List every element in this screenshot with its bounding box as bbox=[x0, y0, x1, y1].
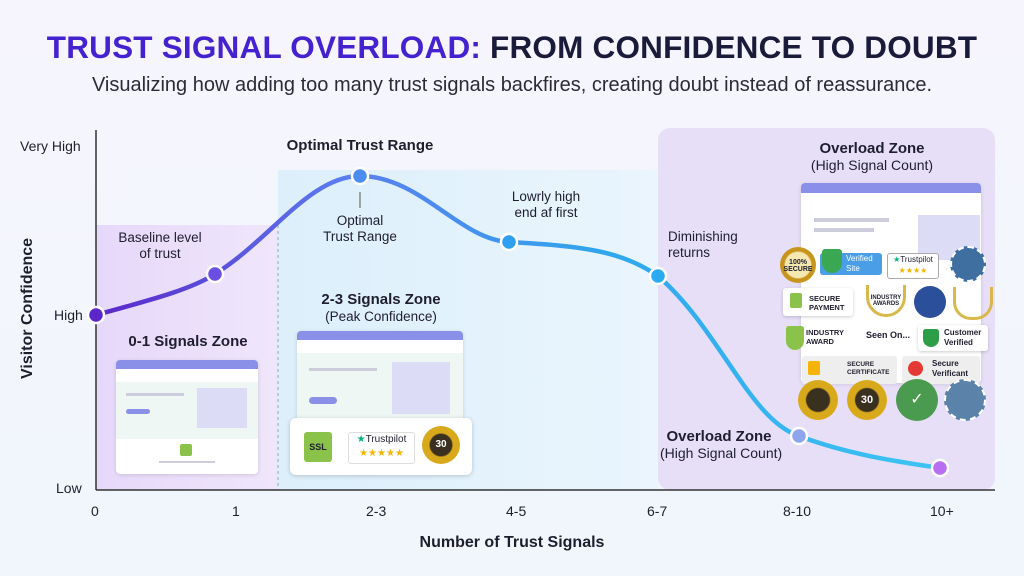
text: Very High bbox=[20, 138, 81, 154]
panel: overload browser with badges: Customer bbox=[944, 328, 981, 337]
panel: overload browser with badges: ★★★★ bbox=[899, 266, 927, 275]
badges row 1: SECURE bbox=[783, 266, 813, 273]
panel: 2-3 signals zone: 2-3 Signals Zone bbox=[321, 291, 441, 308]
x axis labels: 1 bbox=[232, 503, 240, 519]
panel: overload browser with badges: 30 bbox=[861, 394, 873, 406]
badges row 4: CERTIFICATE bbox=[847, 369, 890, 376]
panel: overload browser with badges: Verificant bbox=[932, 369, 968, 378]
panel: overload browser with badges: INDUSTRY bbox=[806, 328, 844, 337]
panel: overload browser with badges: ✓ bbox=[910, 391, 924, 408]
badges row 2 bbox=[783, 288, 853, 316]
x axis title: Number of Trust Signals bbox=[420, 534, 604, 551]
panel: overload browser with badges: Verified bbox=[944, 338, 973, 347]
badges row 4: SECURE bbox=[847, 361, 874, 368]
panel: overload browser with badges: ★Trustpilot bbox=[893, 255, 933, 264]
trust badges card: SSL bbox=[309, 442, 327, 452]
panel: overload browser with badges: Secure bbox=[932, 359, 959, 368]
text: Overload Zone bbox=[666, 428, 772, 445]
trust badges card: ★Trustpilot bbox=[357, 434, 406, 445]
panel: overload browser with badges: INDUSTRY bbox=[871, 295, 901, 301]
panel: overload browser with badges bbox=[780, 182, 993, 421]
text: end af first bbox=[514, 205, 578, 220]
x axis labels: 0 bbox=[91, 503, 99, 519]
seal badges bbox=[798, 380, 838, 420]
annotations: of trust bbox=[139, 246, 181, 261]
text: Trust Range bbox=[323, 229, 397, 244]
text: Overload Zone bbox=[819, 140, 925, 157]
text: Lowrly high bbox=[512, 189, 580, 204]
text: Diminishing bbox=[668, 229, 738, 244]
curve bbox=[96, 176, 940, 468]
text: (High Signal Count) bbox=[811, 157, 933, 173]
x axis labels: 4-5 bbox=[506, 503, 526, 519]
badges row 2: PAYMENT bbox=[809, 303, 844, 312]
zone backgrounds bbox=[96, 128, 995, 490]
x axis labels: 6-7 bbox=[647, 503, 667, 519]
text: Optimal Trust Range bbox=[287, 137, 433, 154]
trust badges card bbox=[290, 418, 472, 475]
panel: overload browser with badges: Seen On... bbox=[866, 330, 910, 340]
data points bbox=[88, 168, 948, 476]
panel: 2-3 signals zone: (Peak Confidence) bbox=[325, 309, 437, 324]
trust badges card: ★★★★★ bbox=[359, 448, 404, 459]
x axis labels: 8-10 bbox=[783, 503, 811, 519]
badges row 1 bbox=[780, 247, 816, 283]
trust badges card: 30 bbox=[435, 439, 447, 450]
panel: overload browser with badges: AWARDS bbox=[873, 301, 899, 307]
panel: 2-3 signals zone bbox=[288, 291, 474, 478]
badges row 4 bbox=[802, 356, 897, 384]
text: Optimal bbox=[337, 213, 383, 228]
panel: 0-1 signals zone: 0-1 Signals Zone bbox=[128, 333, 248, 350]
subtitle: Visualizing how adding too many trust signals backfires, creating doubt instead of reassurance. bbox=[92, 74, 932, 96]
x axis labels: 2-3 bbox=[366, 503, 386, 519]
panel: overload browser with badges: Site bbox=[846, 264, 860, 273]
annotations bbox=[118, 230, 202, 261]
text: (High Signal Count) bbox=[660, 445, 782, 461]
text: returns bbox=[668, 245, 710, 260]
axes bbox=[96, 130, 995, 490]
x axis labels bbox=[91, 503, 954, 519]
panel: 0-1 signals zone bbox=[114, 333, 260, 476]
annotations: Baseline level bbox=[118, 230, 202, 245]
y axis title: Visitor Confidence bbox=[19, 238, 36, 379]
badges row 3 bbox=[786, 326, 804, 350]
badges row 1: 100% bbox=[789, 259, 807, 266]
text: High bbox=[54, 307, 83, 323]
title: TRUST SIGNAL OVERLOAD: FROM CONFIDENCE TO DOUBT bbox=[47, 29, 977, 65]
text: Low bbox=[56, 480, 82, 496]
panel: overload browser with badges: AWARD bbox=[806, 337, 834, 346]
panel: overload browser with badges: Verified bbox=[846, 254, 873, 263]
x axis labels: 10+ bbox=[930, 503, 954, 519]
y axis labels bbox=[20, 138, 83, 496]
badges row 2: SECURE bbox=[809, 294, 840, 303]
